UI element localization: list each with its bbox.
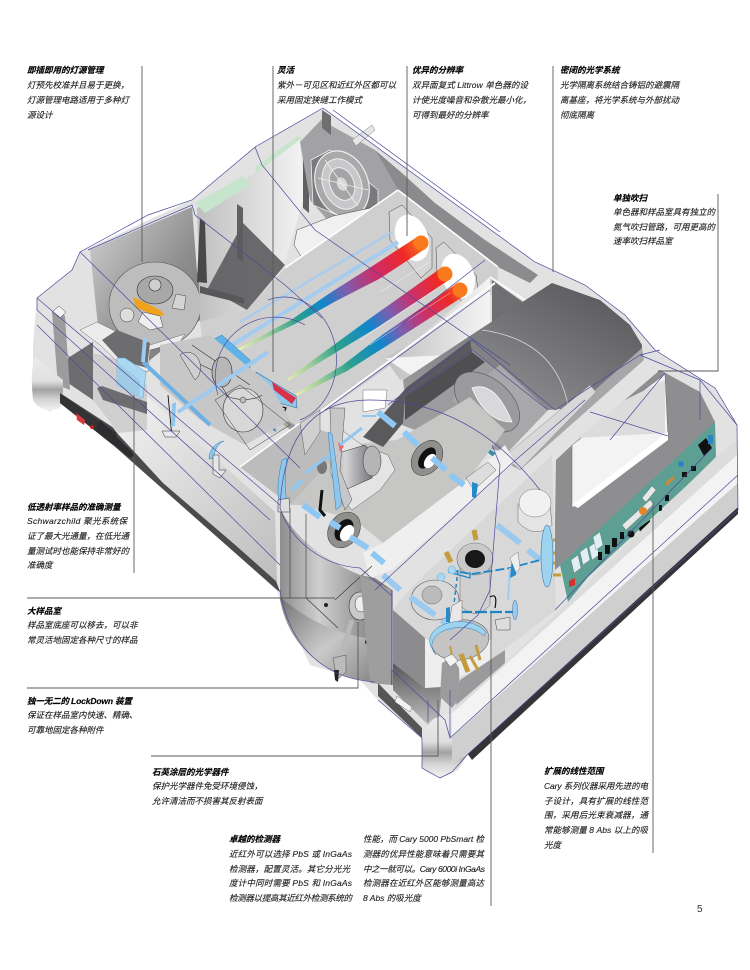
text: flexibility: 紫外－可见区和近红外区都可以	[277, 80, 397, 90]
text: sealed optics: 彻底隔离	[560, 110, 596, 120]
text: resolution	[412, 65, 531, 120]
sample chamber cylinder	[280, 508, 392, 682]
text: detectors column one: 检测器以提高其近红外检测系统的	[229, 893, 353, 903]
text: resolution: 可得到最好的分辨率	[412, 110, 490, 120]
text: independent purge	[613, 193, 717, 246]
sample aperture front	[321, 506, 367, 554]
text: lamp management: 灯源管理电路适用于多种灯	[27, 95, 131, 105]
text: large sample compartment: 样品室底座可以移去，可以非	[27, 620, 139, 630]
central partition walls	[197, 140, 305, 322]
text: independent purge: 氮气吹扫管路，可用更高的	[613, 222, 717, 232]
text: LockDown device: 保证在样品室内快速、精确、	[27, 710, 138, 720]
lockdown key	[333, 592, 371, 682]
detector beam strips	[383, 525, 540, 630]
text: independent purge: 单独吹扫	[613, 193, 649, 203]
detector optics inside box	[411, 489, 552, 664]
sample compartment central mount	[300, 408, 395, 516]
text: quartz coated optics: 石英涂层的光学器件	[152, 767, 230, 777]
dome cover of sample compartment	[403, 283, 642, 410]
text: flexibility: 采用固定狭缝工作模式	[277, 95, 364, 105]
text: sealed optics: 光学隔离系统结合铸铝的避震隔	[560, 80, 681, 90]
text: low transmittance accuracy: 低透射率样品的准确测量	[27, 502, 122, 512]
text: extended linear range: 常能够测量 8 Abs 以上的吸	[544, 825, 648, 835]
green vent strips	[195, 136, 302, 213]
text: flexibility	[277, 65, 397, 105]
chamber mirrors	[278, 458, 496, 512]
leader lines	[27, 66, 718, 906]
text: large sample compartment	[27, 606, 139, 645]
text: sealed optics: 离基座，将光学系统与外部扰动	[560, 95, 681, 105]
translucent casing outline	[37, 108, 738, 778]
text: sealed optics: 密闭的光学系统	[560, 65, 621, 75]
cooling fan	[305, 143, 379, 225]
electronics board	[560, 422, 716, 602]
text: sealed optics	[560, 65, 681, 120]
text: flexibility: 灵活	[277, 65, 296, 75]
text: LockDown device: 可靠地固定各种附件	[27, 725, 105, 735]
right compartment panel	[555, 370, 715, 570]
text: low transmittance accuracy: 量测试时也能保持非常好的	[27, 546, 131, 556]
front base dark edge	[60, 393, 280, 592]
text: extended linear range: 扩展的线性范围	[544, 766, 605, 776]
text: detectors column one: 度计中同时需要 PbS 和 InGaAs	[229, 878, 353, 888]
monochromator front wall	[385, 277, 490, 380]
right front ledge	[452, 440, 737, 713]
text: lamp management	[27, 65, 131, 120]
left tower and foot	[32, 306, 135, 458]
text: low transmittance accuracy: 准确度	[27, 560, 54, 570]
dome lower band	[500, 348, 644, 470]
text: lamp management: 源设计	[27, 110, 54, 120]
text: resolution: 计使光度噪音和杂散光最小化，	[412, 95, 531, 105]
right front band	[452, 455, 738, 737]
left low compartment	[68, 342, 147, 433]
sample plate aperture back	[405, 434, 449, 482]
text: detectors column one	[229, 834, 353, 903]
text: large sample compartment: 常灵活地固定各种尺寸的样品	[27, 635, 138, 645]
front corner pillar and foot	[378, 654, 467, 777]
light blue source beams	[143, 338, 268, 478]
text: lamp management: 即插即用的灯源管理	[27, 65, 105, 75]
left back compartment	[90, 207, 205, 372]
base body silhouette	[33, 108, 738, 778]
text: independent purge: 速率吹扫样品室	[613, 236, 674, 246]
text: detectors column two: 检测器在近红外区能够测量高达	[363, 878, 485, 888]
text: low transmittance accuracy: Schwarzchild 聚光系统保	[27, 516, 128, 526]
text: extended linear range: 光度	[544, 840, 563, 850]
text: extended linear range: Cary 系列仪器采用先进的电	[544, 781, 648, 791]
lamp and mount area	[160, 335, 350, 505]
page number: 5	[697, 904, 703, 915]
sample compartment floor plate	[290, 397, 505, 543]
lamp module circle	[80, 262, 201, 372]
text: resolution: 双异面复式 Littrow 单色器的设	[412, 80, 529, 90]
condenser lens block	[117, 358, 146, 398]
text: detectors column one: 卓越的检测器	[229, 834, 282, 844]
grating mount left	[389, 205, 435, 278]
text: detectors column two: 中之一就可以。Cary 6000i InGaAs	[363, 864, 486, 874]
monochromator floor	[200, 190, 498, 435]
text: LockDown device: 独一无二的 LockDown 装置	[27, 696, 133, 706]
text: detectors column two	[363, 834, 486, 903]
small detector mirrors	[437, 552, 520, 630]
text: extended linear range	[544, 766, 649, 850]
text: low transmittance accuracy	[27, 502, 131, 570]
text: large sample compartment: 大样品室	[27, 606, 63, 616]
sample compartment window	[402, 350, 548, 458]
large mirrors	[430, 525, 563, 672]
sample beam strips	[292, 412, 464, 563]
text: quartz coated optics: 允许清洁而不损害其反射表面	[152, 796, 264, 806]
text: detectors column two: 8 Abs 的吸光度	[363, 893, 422, 903]
white duct under fan	[294, 207, 375, 258]
dispersed colour beams	[232, 232, 468, 396]
text: detectors column one: 检测器，配置灵活。其它分光光	[229, 864, 351, 874]
text: lamp management: 灯预先校准并且易于更换，	[27, 80, 129, 90]
text: low transmittance accuracy: 证了最大光通量，在低光通	[27, 531, 131, 541]
right back upper wall	[300, 118, 398, 240]
text: detectors column one: 近红外可以选择 PbS 或 InGaAs	[229, 849, 353, 859]
monochromator dark wall band	[375, 150, 538, 283]
grating mount right	[435, 242, 481, 310]
text: quartz coated optics: 保护光学器件免受环境侵蚀，	[152, 781, 263, 791]
text: detectors column two: 测器的优异性能意味着只需要其	[363, 849, 485, 859]
instrument cutaway illustration	[32, 108, 738, 778]
text: resolution: 优异的分辨率	[412, 65, 465, 75]
right front optics box	[393, 455, 556, 690]
left front lower strip	[93, 397, 277, 582]
lens and slit optics cluster	[212, 335, 325, 450]
text: extended linear range: 围，采用后光束衰减器，通	[544, 810, 649, 820]
shadow under optics box	[393, 663, 442, 735]
text: LockDown device	[27, 696, 138, 735]
text: quartz coated optics	[152, 767, 264, 806]
text: detectors column two: 性能，而 Cary 5000 PbSmart 检	[363, 834, 485, 844]
text: independent purge: 单色器和样品室具有独立的	[613, 207, 717, 217]
text: extended linear range: 子设计，具有扩展的线性范	[544, 796, 649, 806]
